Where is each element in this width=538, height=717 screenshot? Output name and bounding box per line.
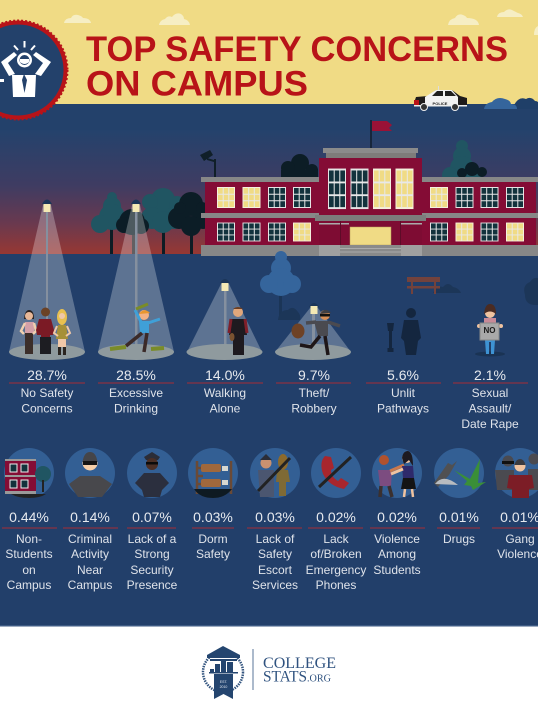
stat: criminal activity: Activity bbox=[71, 547, 109, 561]
stat: emergency phones: Phones bbox=[316, 578, 356, 592]
stat: theft: Theft/ bbox=[299, 386, 330, 400]
stat: excessive drinking: 28.5% bbox=[116, 367, 156, 383]
wordmark bbox=[263, 655, 336, 686]
stat: theft: 9.7% bbox=[298, 367, 330, 383]
stat: security presence: Security bbox=[130, 563, 174, 577]
security camera bbox=[200, 150, 216, 177]
protester: NO bbox=[484, 326, 496, 335]
stat: escort services: Safety bbox=[258, 547, 292, 561]
stat: unlit pathways: 5.6% bbox=[387, 367, 419, 383]
stat: escort services bbox=[247, 509, 302, 592]
stat: walking alone: 14.0% bbox=[205, 367, 245, 383]
stat: drugs: Drugs bbox=[443, 532, 475, 546]
stat: walking alone: Walking bbox=[204, 386, 246, 400]
stat: violence among students bbox=[370, 509, 425, 577]
school building bbox=[201, 120, 538, 256]
dark bushes bbox=[278, 278, 538, 320]
stat: drugs: 0.01% bbox=[439, 509, 479, 525]
robber bbox=[292, 310, 340, 355]
wordmark: STATS bbox=[263, 668, 307, 686]
stat: criminal activity: Criminal bbox=[68, 532, 112, 546]
stat: security presence: Lack of a bbox=[128, 532, 177, 546]
door bbox=[350, 227, 391, 245]
stat: no safety concerns: Concerns bbox=[21, 402, 73, 416]
icon: bunk beds bbox=[188, 448, 238, 498]
header sky bbox=[0, 0, 538, 104]
wordmark: .ORG bbox=[307, 674, 331, 684]
man with bag bbox=[229, 307, 247, 355]
stat: non-students: on bbox=[22, 563, 36, 577]
seal bbox=[203, 646, 243, 699]
three people bbox=[21, 308, 70, 355]
stat: emergency phones bbox=[306, 509, 366, 592]
stat: excessive drinking bbox=[98, 367, 174, 416]
icon: security guard bbox=[127, 448, 177, 498]
stat: excessive drinking: Drinking bbox=[114, 402, 158, 416]
stat: theft: Robbery bbox=[291, 402, 337, 416]
lamp 2 with drinker bbox=[98, 200, 174, 360]
seal: EST. bbox=[220, 680, 227, 684]
cloud silhouettes bbox=[484, 98, 538, 109]
dusk sky bbox=[0, 130, 538, 254]
seal: 2010 bbox=[220, 685, 227, 689]
trees behind bbox=[91, 140, 487, 254]
stat: non-students: Non- bbox=[16, 532, 42, 546]
stat: security presence: Presence bbox=[127, 578, 178, 592]
title: ON CAMPUS bbox=[86, 64, 308, 104]
stat: non-students: 0.44% bbox=[9, 509, 49, 525]
stat: theft bbox=[276, 367, 351, 416]
badge icon bbox=[0, 20, 68, 120]
stat: dorm safety: 0.03% bbox=[193, 509, 233, 525]
stat: sexual assault: Date Rape bbox=[461, 417, 519, 431]
logo bbox=[203, 646, 336, 699]
stat: dorm safety: Dorm bbox=[198, 532, 228, 546]
icon: gang bbox=[495, 448, 538, 498]
stat: escort services: Lack of bbox=[256, 532, 295, 546]
footer bbox=[0, 625, 538, 717]
title: TOP SAFETY CONCERNS bbox=[86, 30, 508, 69]
stat: emergency phones: Lack bbox=[323, 532, 350, 546]
stat: violence among students: Violence bbox=[374, 532, 420, 546]
icon: broken phone bbox=[311, 448, 361, 498]
stat: sexual assault bbox=[453, 367, 528, 431]
stat: non-students: Campus bbox=[7, 578, 51, 592]
stat: unlit pathways: Unlit bbox=[391, 386, 416, 400]
unlit pathways silhouette bbox=[387, 308, 421, 355]
stat: non-students: Students bbox=[5, 547, 53, 561]
stat: emergency phones: 0.02% bbox=[316, 509, 356, 525]
stat: security presence: Strong bbox=[134, 547, 170, 561]
stat: violence among students: Among bbox=[378, 547, 416, 561]
steps bbox=[319, 245, 422, 256]
stat: violence among students: Students bbox=[373, 563, 421, 577]
stat: criminal activity: Near bbox=[77, 563, 103, 577]
blue tree bbox=[260, 251, 301, 320]
center block bbox=[319, 158, 422, 216]
flag bbox=[370, 120, 392, 148]
stat: gang violence bbox=[492, 509, 538, 561]
stat: non-students bbox=[2, 509, 57, 592]
left and right wings bbox=[205, 182, 536, 246]
title bbox=[86, 30, 508, 104]
lamp 4 with robber bbox=[275, 303, 351, 360]
stat: unlit pathways bbox=[366, 367, 441, 416]
lamp 3 with student bbox=[186, 279, 262, 360]
stat: security presence bbox=[127, 509, 178, 592]
stat: escort services: 0.03% bbox=[255, 509, 295, 525]
stat: walking alone bbox=[187, 367, 263, 416]
stat: excessive drinking: Excessive bbox=[109, 386, 163, 400]
police car: POLICE bbox=[433, 101, 448, 106]
stat: no safety concerns: No Safety bbox=[21, 386, 73, 400]
stat: dorm safety bbox=[192, 509, 234, 561]
icon: masked criminal bbox=[65, 448, 115, 498]
stat: criminal activity: Campus bbox=[68, 578, 112, 592]
stat: sexual assault: 2.1% bbox=[474, 367, 506, 383]
drunk student bbox=[110, 304, 164, 352]
footer rule bbox=[0, 625, 538, 626]
wordmark: COLLEGE bbox=[263, 655, 336, 672]
stat: unlit pathways: Pathways bbox=[377, 402, 429, 416]
icon: fighting students bbox=[372, 448, 422, 498]
icon: building bbox=[4, 448, 54, 498]
stat: sexual assault: Sexual bbox=[472, 386, 508, 400]
stat: no safety concerns bbox=[9, 367, 85, 416]
stat: gang violence: Gang bbox=[505, 532, 535, 546]
stat: no safety concerns: 28.7% bbox=[27, 367, 67, 383]
icon: drugs bbox=[434, 448, 486, 498]
protester bbox=[475, 304, 505, 356]
stat: drugs bbox=[437, 509, 480, 546]
stat: sexual assault: Assault/ bbox=[469, 402, 512, 416]
stat: criminal activity bbox=[63, 509, 118, 592]
windows bbox=[218, 170, 524, 241]
stat: walking alone: Alone bbox=[210, 402, 241, 416]
stat: criminal activity: 0.14% bbox=[70, 509, 110, 525]
stat: emergency phones: of/Broken bbox=[310, 547, 362, 561]
stat: escort services: Escort bbox=[258, 563, 293, 577]
stat: violence among students: 0.02% bbox=[377, 509, 417, 525]
stat: emergency phones: Emergency bbox=[306, 563, 366, 577]
police car bbox=[414, 86, 467, 110]
bench bbox=[407, 277, 440, 294]
stat: escort services: Services bbox=[252, 578, 298, 592]
stat: security presence: 0.07% bbox=[132, 509, 172, 525]
icon: escort services bbox=[250, 448, 300, 498]
stat: dorm safety: Safety bbox=[196, 547, 230, 561]
lamp 1 with group bbox=[9, 200, 85, 360]
ground bbox=[0, 254, 538, 627]
clouds bbox=[64, 9, 538, 35]
